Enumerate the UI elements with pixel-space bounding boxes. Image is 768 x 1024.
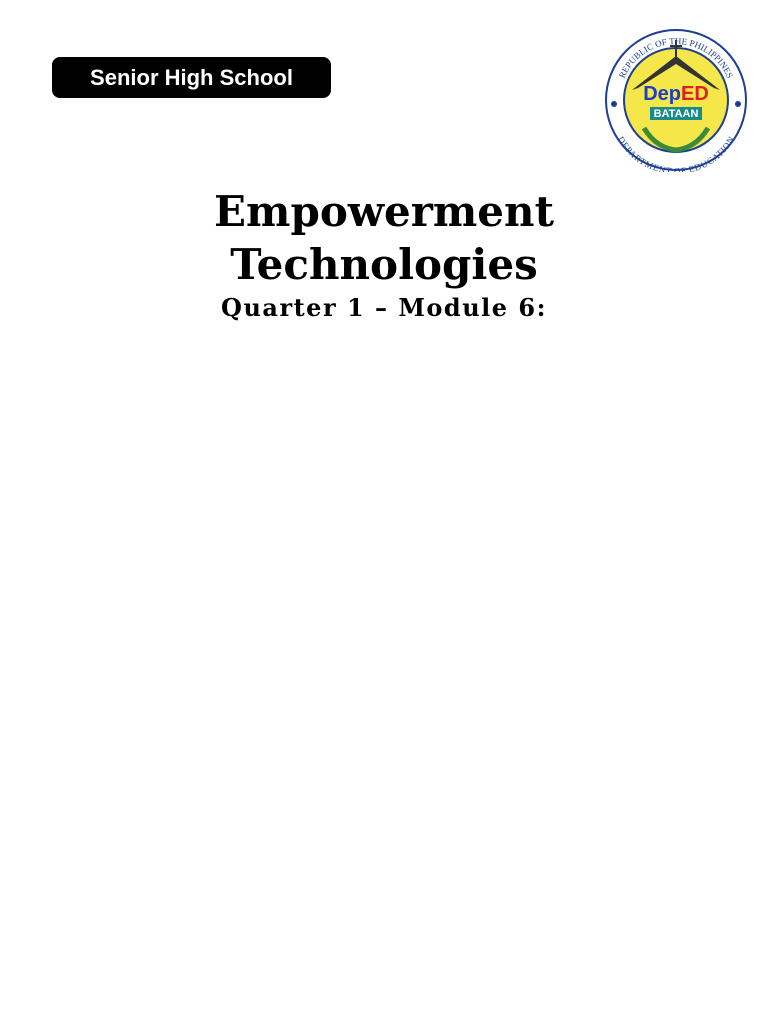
logo: DepEd Bataan seal: REPUBLIC OF THE PHILIPPINES: [619, 38, 733, 78]
badge: Senior High School: [52, 57, 331, 98]
badge: Senior High School: Senior High School: [90, 64, 293, 90]
logo: DepEd Bataan seal: DepED: [643, 83, 709, 105]
title: Empowerment Technologies: [214, 187, 554, 289]
logo: DepEd Bataan seal: [605, 29, 747, 172]
subtitle: Quarter 1 – Module 6: Quarter 1 – Module 6:: [221, 293, 547, 322]
logo: DepEd Bataan seal: BATAAN: [654, 108, 698, 120]
title: Empowerment Technologies: Technologies: [230, 240, 538, 289]
title: Empowerment Technologies: Empowerment: [214, 187, 554, 236]
title block: [214, 187, 554, 322]
